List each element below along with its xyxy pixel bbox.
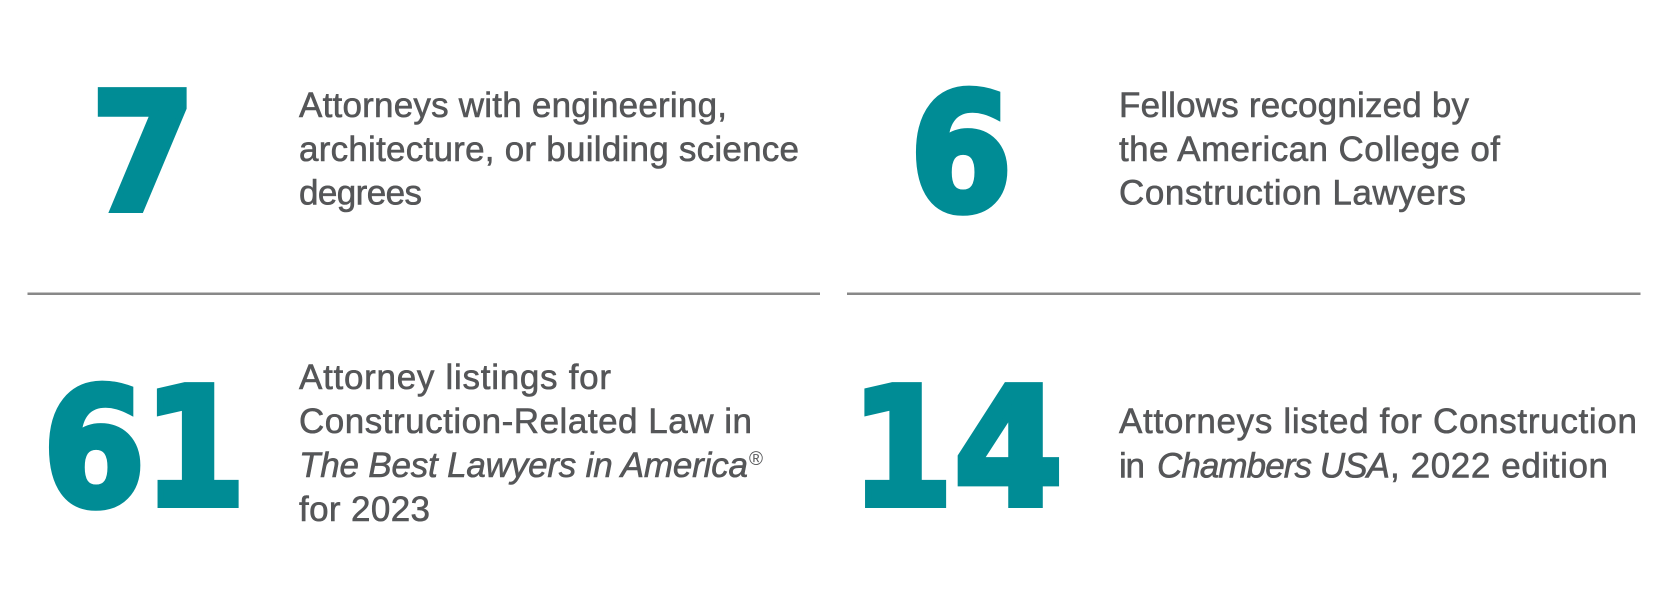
number 61: 1 [144, 353, 246, 543]
number 14: 1 [851, 353, 953, 543]
description: attorneys with degrees: Attorneys with engineering, [299, 86, 727, 125]
number 14 [851, 353, 1063, 543]
description: attorney listings [299, 358, 763, 529]
description: attorney listings: The Best Lawyers in America [299, 446, 748, 485]
description: attorney listings: for 2023 [299, 490, 430, 529]
panel: fellows [910, 59, 1500, 249]
description: attorneys with degrees: degrees [299, 174, 422, 212]
number 61 [43, 353, 246, 544]
description: attorneys listed: Chambers USA [1157, 446, 1390, 486]
description: attorneys listed: , 2022 edition [1390, 446, 1608, 486]
description: fellows recognized: Construction Lawyers [1119, 174, 1466, 212]
description: attorneys listed: Attorneys listed for Construction [1119, 402, 1637, 441]
description: fellows recognized: Fellows recognized by [1119, 86, 1470, 125]
divider: left [28, 292, 820, 295]
description: attorney listings: Attorney listings for [299, 358, 611, 397]
panel: Best Lawyers listings [43, 353, 763, 544]
description: attorneys listed: in [1119, 446, 1145, 486]
description: attorneys listed [1119, 402, 1637, 486]
description: fellows recognized: the American College of [1119, 130, 1500, 169]
number 61: 6 [43, 354, 145, 544]
divider: right [847, 292, 1640, 295]
panel: engineering attorneys [91, 59, 799, 248]
number 7: 7 [91, 59, 195, 248]
description: attorney listings: Construction-Related Law in [299, 402, 752, 441]
description: attorneys with degrees [299, 86, 799, 212]
description: attorneys with degrees: architecture, or building science [299, 130, 799, 169]
panel: Chambers listings [851, 353, 1637, 543]
number 6: 6 [910, 59, 1012, 249]
number 14: 4 [954, 354, 1063, 543]
description: attorney listings: ® [749, 449, 763, 470]
description: fellows recognized [1119, 86, 1500, 212]
